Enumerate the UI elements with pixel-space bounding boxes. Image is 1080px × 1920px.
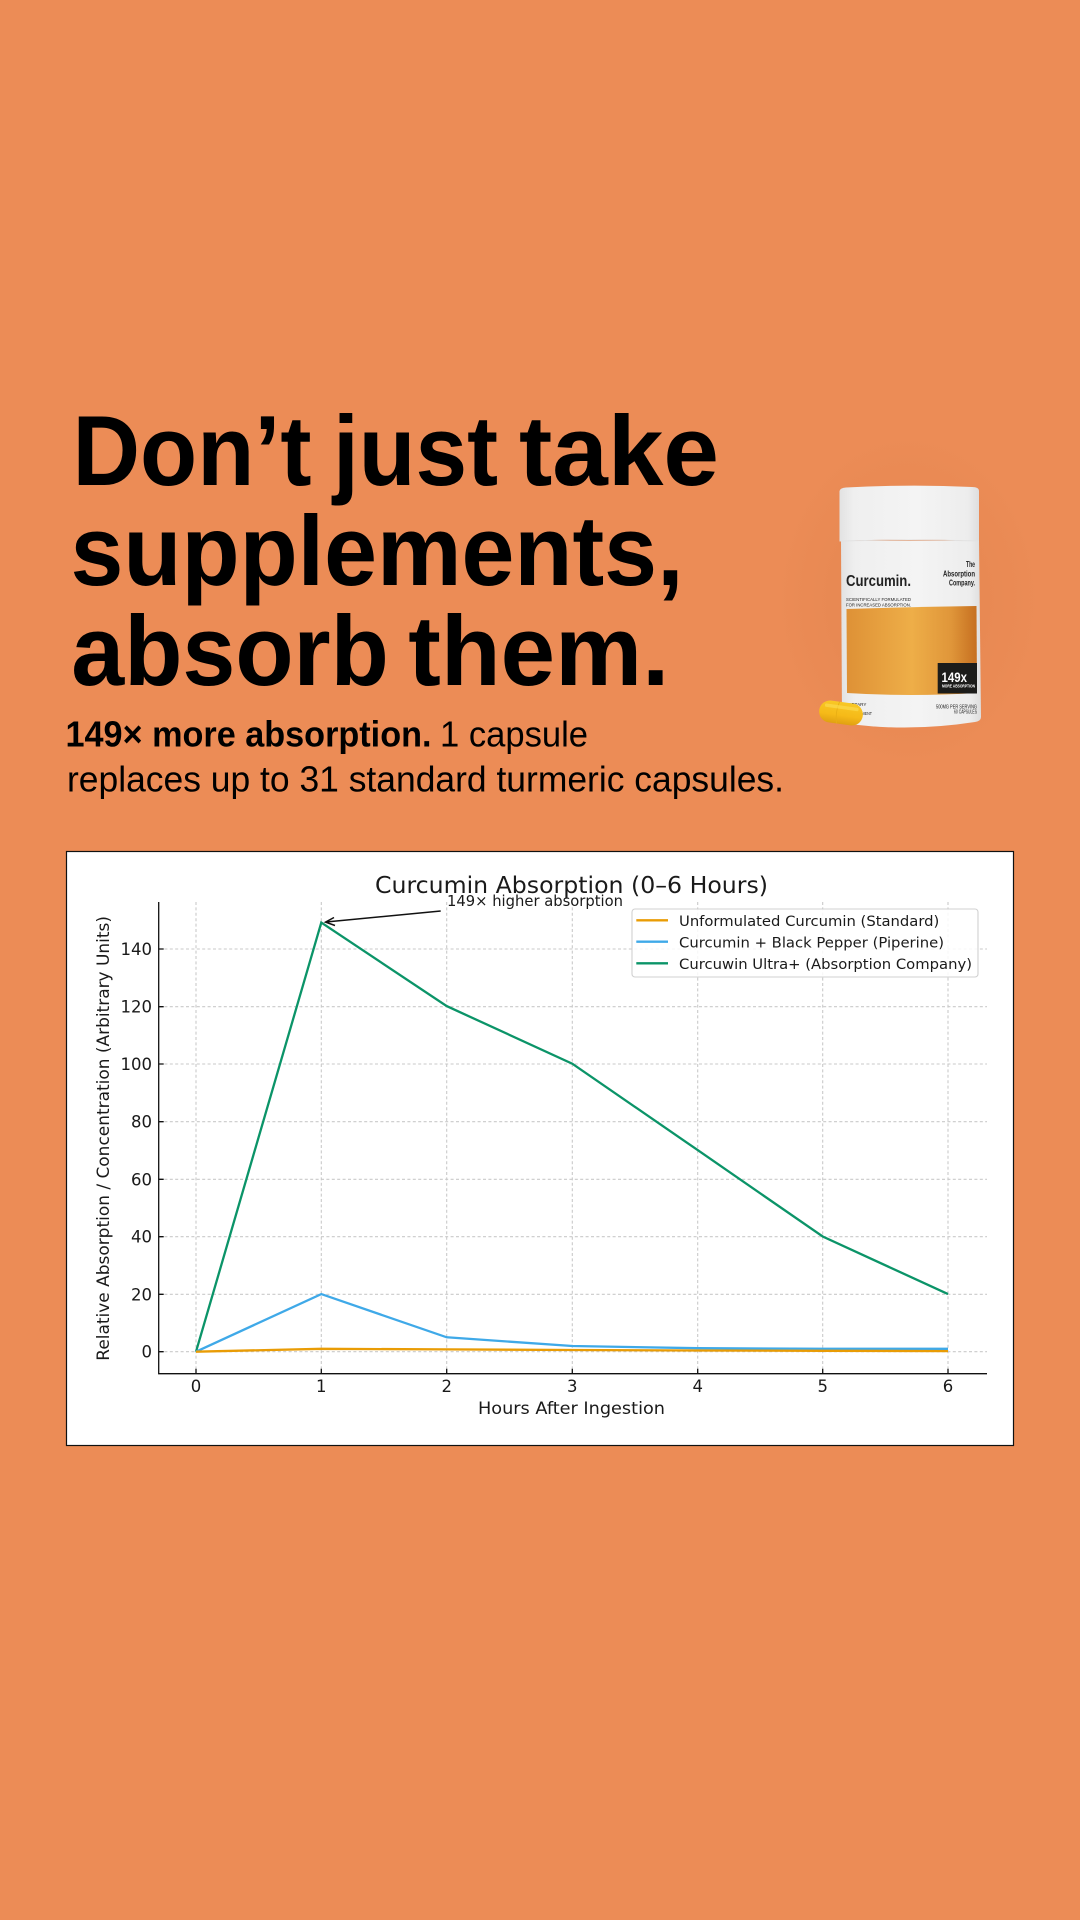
x axis tick labels: 3	[567, 1377, 578, 1396]
headline: Don’t	[72, 395, 312, 506]
product image: curcumin bottle and capsule: Curcumin.	[846, 573, 911, 590]
headline: absorb	[71, 595, 389, 706]
x axis tick labels	[191, 1377, 953, 1396]
headline: supplements,	[70, 495, 684, 606]
x axis tick labels: 5	[817, 1377, 828, 1396]
y axis tick labels: 0	[142, 1343, 152, 1362]
product image: curcumin bottle and capsule: MORE ABSORPTION	[942, 684, 975, 688]
product image: curcumin bottle and capsule: 149x	[942, 669, 967, 685]
panel: absorption chart	[66, 852, 1014, 1446]
subheading: 1 capsule	[440, 714, 588, 754]
y axis label: Relative Absorption / Concentration (Arbitrary Units)	[94, 916, 114, 1361]
product image: curcumin bottle and capsule: 60 CAPSULES	[954, 710, 977, 716]
chart grid	[159, 902, 987, 1373]
annotation: 149x higher absorption	[326, 892, 623, 926]
x axis tick labels: 1	[316, 1377, 327, 1396]
subheading	[66, 714, 784, 800]
legend: Curcumin + Black Pepper (Piperine)	[679, 936, 944, 952]
product image: curcumin bottle and capsule: SUPPLEMENT	[847, 711, 872, 716]
y axis tick labels: 20	[131, 1285, 152, 1304]
y axis tick labels: 60	[131, 1170, 152, 1189]
product image: curcumin bottle and capsule: Absorption	[943, 568, 975, 578]
y axis tick labels: 80	[131, 1113, 152, 1132]
headline	[70, 395, 719, 706]
legend: Curcuwin Ultra+ (Absorption Company)	[679, 957, 972, 973]
x axis tick labels: 4	[692, 1377, 703, 1396]
chart title: Curcumin Absorption (0–6 Hours)	[375, 873, 768, 899]
line: Unformulated Curcumin	[196, 1349, 948, 1352]
y axis tick labels: 140	[120, 940, 152, 959]
product image: curcumin bottle and capsule: 500MG PER SERVING	[936, 704, 977, 710]
product image: curcumin bottle and capsule	[773, 430, 1043, 770]
product image: curcumin bottle and capsule: The	[966, 559, 975, 569]
y axis tick labels: 100	[120, 1055, 152, 1074]
x axis tick labels: 6	[943, 1377, 953, 1396]
product image: curcumin bottle and capsule: DIETARY	[847, 702, 866, 707]
y axis tick labels: 40	[131, 1228, 152, 1247]
chart axes	[159, 902, 987, 1374]
headline: take	[519, 395, 719, 506]
y axis tick labels	[120, 940, 152, 1362]
product image: curcumin bottle and capsule: FOR INCREASED ABSORPTION.	[846, 602, 911, 608]
product image: curcumin bottle and capsule: Company.	[949, 578, 975, 588]
product image: curcumin bottle and capsule: SCIENTIFICALLY FORMULATED	[846, 597, 912, 602]
line: Curcumin + Black Pepper	[196, 1294, 948, 1352]
headline: them.	[408, 595, 669, 706]
legend	[632, 909, 978, 977]
subheading: replaces up to 31 standard turmeric capsules.	[67, 759, 784, 800]
subheading: 149× more absorption.	[66, 714, 432, 754]
x axis tick labels: 0	[191, 1377, 201, 1396]
line: Curcuwin Ultra+	[196, 923, 948, 1352]
annotation: 149x higher absorption: 149× higher absorption	[447, 892, 623, 910]
x axis tick labels: 2	[441, 1377, 452, 1396]
y axis tick labels: 120	[120, 998, 152, 1017]
x axis label: Hours After Ingestion	[478, 1399, 665, 1419]
headline: just	[331, 395, 498, 506]
legend: Unformulated Curcumin (Standard)	[679, 914, 939, 930]
